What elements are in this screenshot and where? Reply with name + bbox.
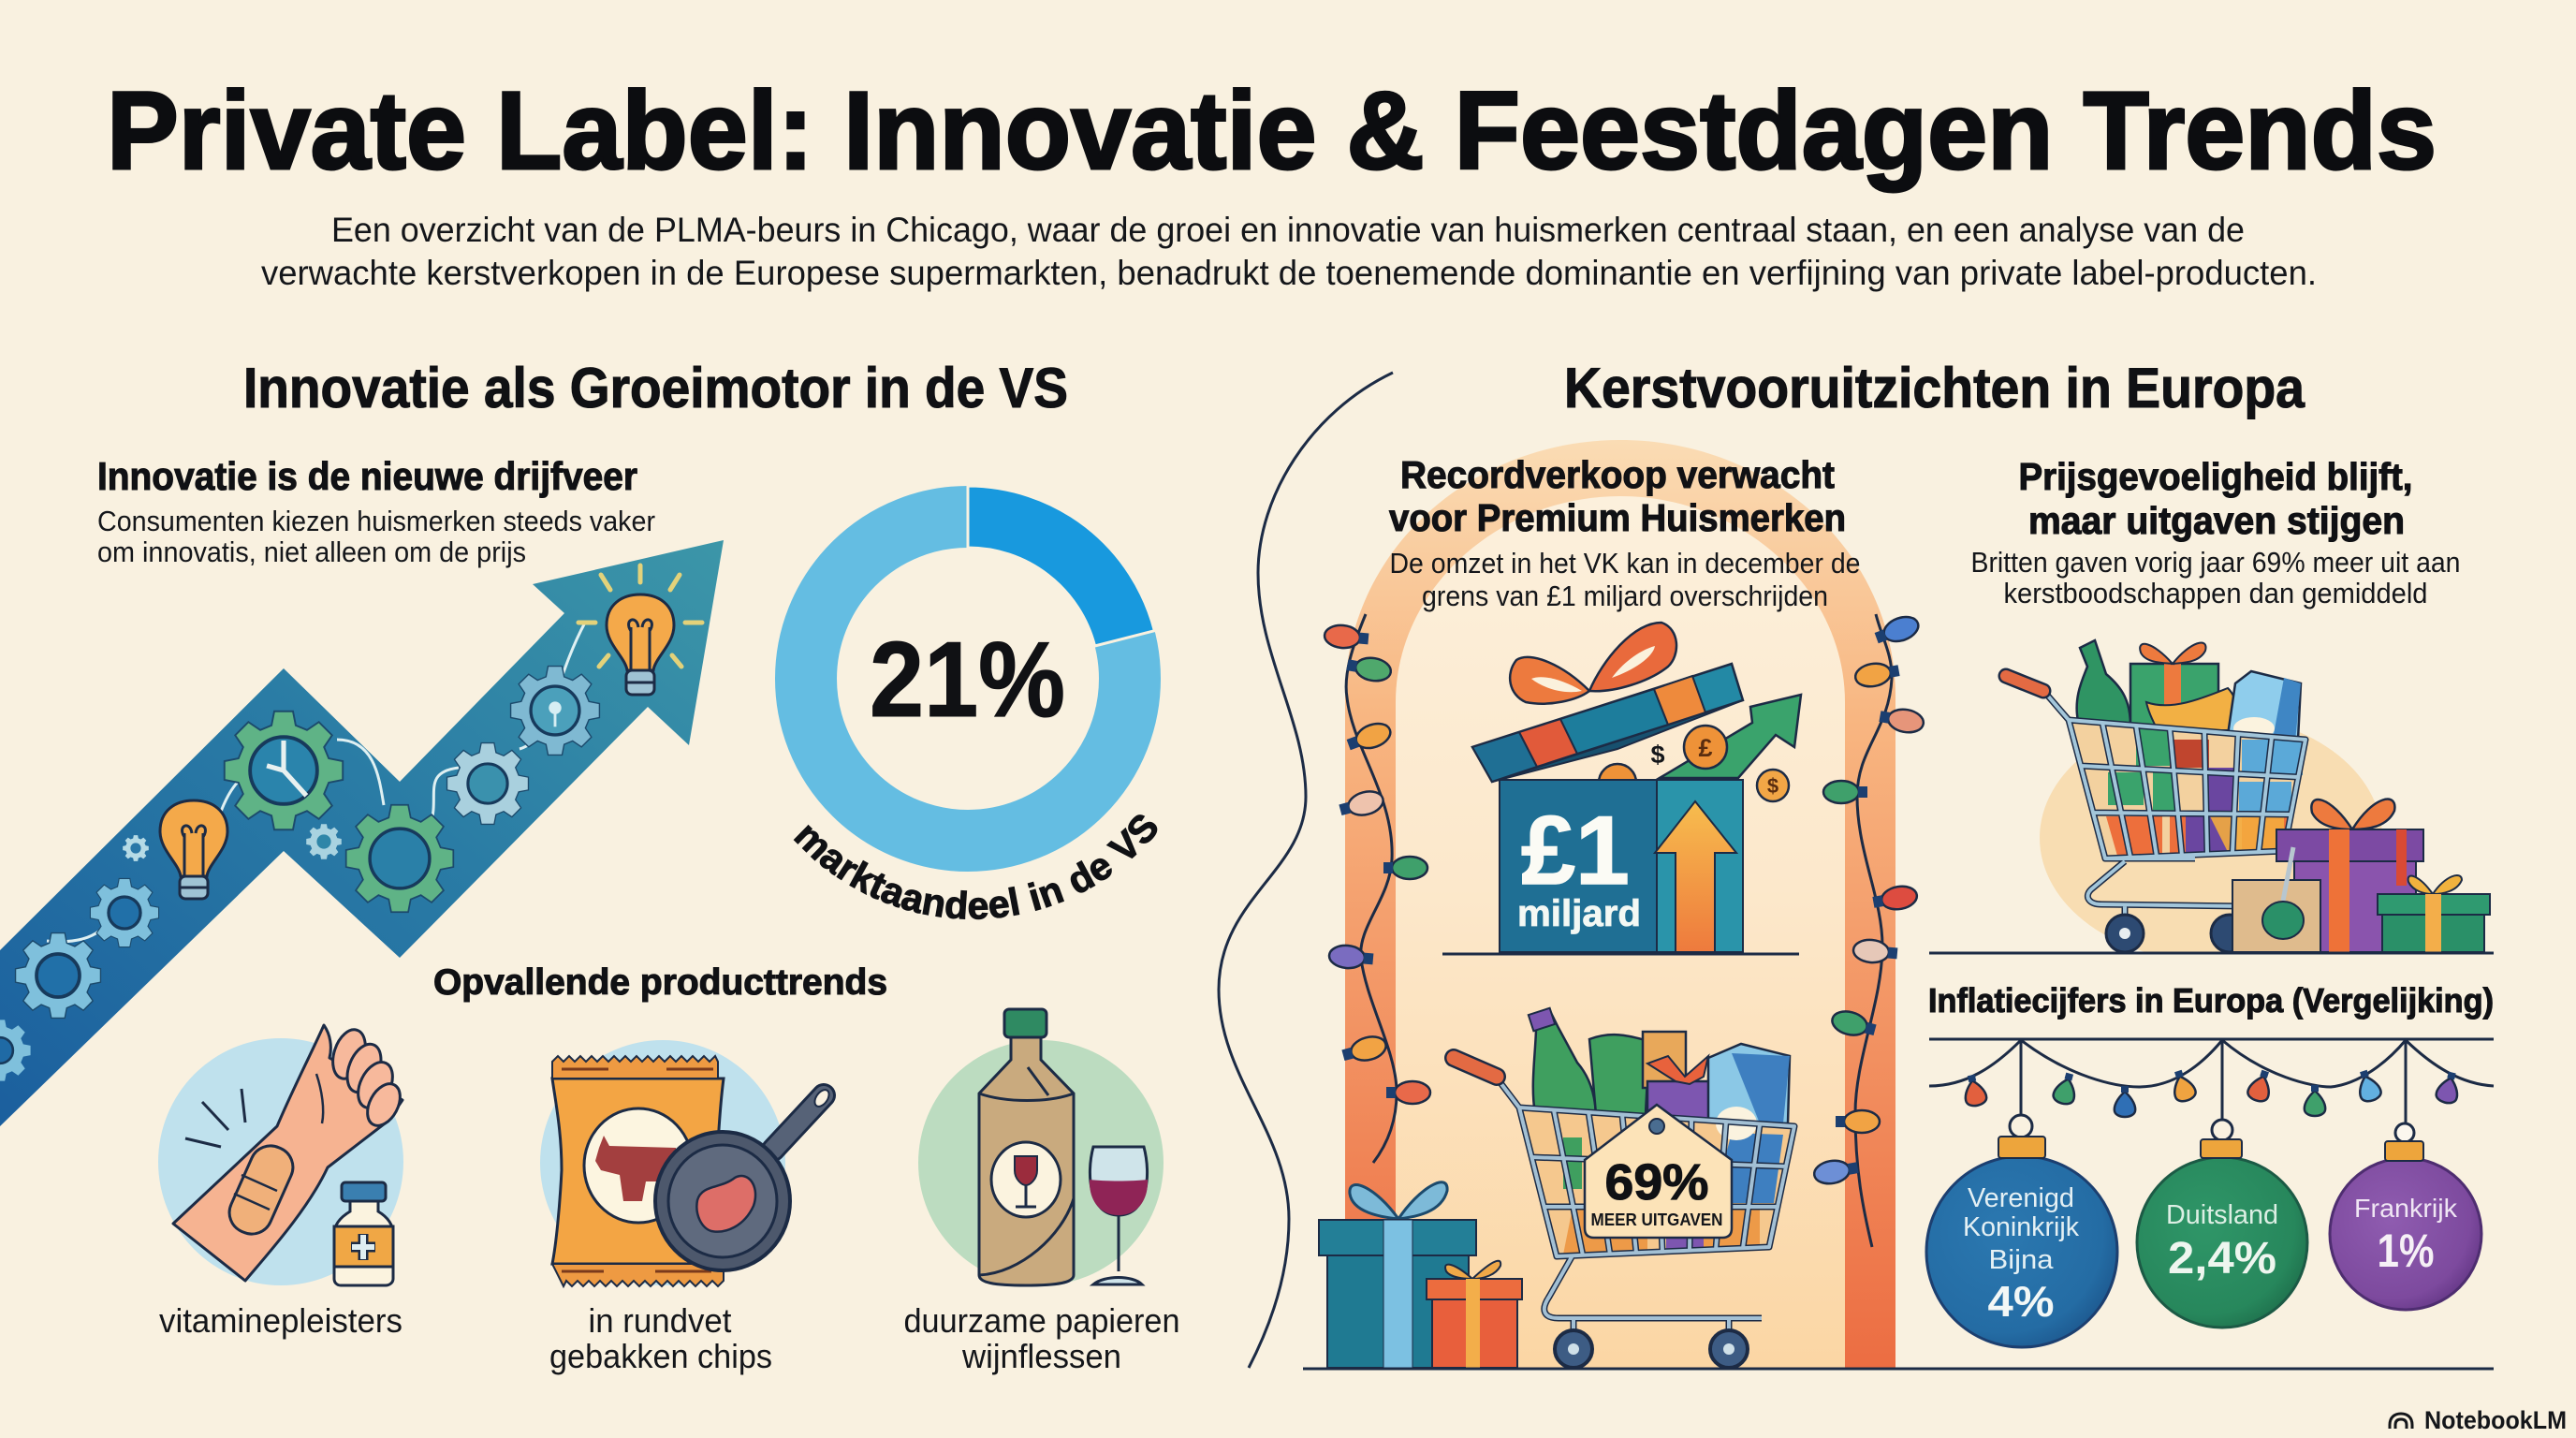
intro text: Een overzicht van de PLMA-beurs in Chicago, waar de groei en innovatie van huismerken centraal staan, en een analyse van de [331,211,2245,249]
icon: paper wine bottle [918,1009,1164,1285]
ornament: Verenigd Koninkrijk: Bijna [1988,1245,2054,1275]
icon: gift with £1 miljard [1472,623,1801,952]
ornament: Verenigd Koninkrijk: Koninkrijk [1963,1212,2079,1242]
text block: prijsgevoeligheid [1971,455,2460,609]
gear small a [123,835,149,861]
cart 2 frame [2045,693,2305,922]
text block: prijsgevoeligheid: kerstboodschappen dan gemiddeld [2003,577,2428,609]
label: chips [549,1301,772,1375]
donut chart: 21% [806,486,1154,841]
curved label: marktaandeel in de VS [794,814,1157,919]
gear small b [306,824,342,859]
intro text [261,211,2317,292]
label: vitaminepleisters: vitaminepleisters [159,1301,402,1340]
tan box with tag [2232,847,2320,952]
gear light [447,743,528,824]
icon: shopping cart with 69% tag [1454,1008,1794,1368]
growth arrow with gears [0,540,724,1126]
coins and growth arrow [1599,695,1801,801]
icon: bulb upper [578,565,702,695]
text block: prijsgevoeligheid: maar uitgaven stijgen [2028,499,2405,542]
label: chips: gebakken chips [549,1337,772,1375]
label: wijnflessen: wijnflessen [961,1337,1121,1375]
icon: gift with £1 miljard: miljard [1517,893,1641,934]
ground line [1303,1367,2494,1371]
NotebookLM logo: NotebookLM [2424,1406,2567,1434]
ornament: Duitsland [2137,1040,2307,1328]
ornament: Verenigd Koninkrijk [1926,1040,2117,1347]
label: wijnflessen [904,1301,1179,1375]
ornament: Verenigd Koninkrijk: 4% [1988,1277,2054,1326]
coins and growth arrow: $ [1767,774,1778,798]
donut chart: 21%: 21% [870,621,1065,740]
purple gift [2276,800,2423,952]
icon: cow [595,1136,676,1201]
label: chips: in rundvet [588,1301,732,1340]
divider curve [1219,373,1393,1368]
cart frame [1499,1080,1794,1339]
price tag 69%: MEER UITGAVEN [1591,1211,1722,1229]
cart 2 contents [2069,640,2305,858]
title: Private Label: Innovatie & Feestdagen Trends [107,69,2437,193]
price tag 69%: 69% [1604,1154,1709,1211]
icon: beef tallow chips [540,1040,832,1286]
text block: prijsgevoeligheid: Prijsgevoeligheid blijft, [2018,455,2413,498]
shelf line right [1929,951,2494,955]
heading: inflatiecijfers: Inflatiecijfers in Europa (Vergelijking) [1928,981,2494,1020]
text block: recordverkoop: Recordverkoop verwacht [1400,453,1835,496]
ornament: Frankrijk: 1% [2378,1225,2434,1277]
ornament: Frankrijk [2330,1040,2481,1310]
icon: small red gift [1427,1261,1522,1368]
gear green medium [346,805,453,912]
rule above garland [1929,1037,2494,1041]
text block: innovatie drijfveer: om innovatis, niet alleen om de prijs [97,536,526,568]
text block: prijsgevoeligheid: Britten gaven vorig jaar 69% meer uit aan [1971,546,2460,579]
coins and growth arrow: $ [1650,741,1665,769]
gear 2 [90,878,159,947]
text block: innovatie drijfveer [97,454,655,568]
coins and growth arrow: £ [1698,734,1713,762]
green gift [2378,875,2490,952]
heading: innovatie: Innovatie als Groeimotor in de VS [243,357,1068,419]
arch panel [1345,440,1895,1368]
garland lights [1929,1040,2494,1117]
wine glass [1090,1147,1148,1284]
text block: recordverkoop [1389,453,1861,612]
vitamin bottle [334,1182,393,1285]
gear green large [225,712,343,829]
cart contents [1519,1008,1794,1256]
text block: recordverkoop: grens van £1 miljard overschrijden [1422,580,1828,612]
shelf line [1442,953,1799,955]
intro text: verwachte kerstverkopen in de Europese supermarkten, benadrukt de toenemende dominantie en verfijning van private label-producten. [261,254,2317,292]
text block: innovatie drijfveer: Consumenten kiezen huismerken steeds vaker [97,505,655,537]
ornament: Duitsland: Duitsland [2166,1200,2278,1230]
heading: producttrends: Opvallende producttrends [433,962,887,1003]
ornament: Verenigd Koninkrijk: Verenigd [1968,1183,2074,1213]
icon: bulb lower [160,800,227,899]
ornament: Frankrijk: Frankrijk [2354,1194,2458,1223]
icon: vitamin patch [158,1025,407,1285]
text block: recordverkoop: voor Premium Huismerken [1389,496,1846,539]
heading: kerst: Kerstvooruitzichten in Europa [1564,357,2305,419]
label: wijnflessen: duurzame papieren [904,1301,1179,1340]
gift bow [1510,623,1676,704]
text block: recordverkoop: De omzet in het VK kan in december de [1389,547,1861,580]
ornament: Duitsland: 2,4% [2168,1234,2276,1284]
gift lid [1472,664,1743,782]
text block: innovatie drijfveer: Innovatie is de nieuwe drijfveer [97,454,637,498]
gear top [511,667,599,755]
gear 1 [16,933,100,1018]
icon: large teal gift [1319,1182,1476,1368]
icon: gift with £1 miljard: £1 [1521,797,1630,905]
icon: shopping cart with gifts [2006,640,2490,961]
icon: pan with steak [655,1087,832,1270]
price tag 69% [1585,1105,1732,1238]
string lights left [1324,614,1430,1163]
string lights right [1812,612,1925,1247]
gear small bottom [0,1020,31,1081]
